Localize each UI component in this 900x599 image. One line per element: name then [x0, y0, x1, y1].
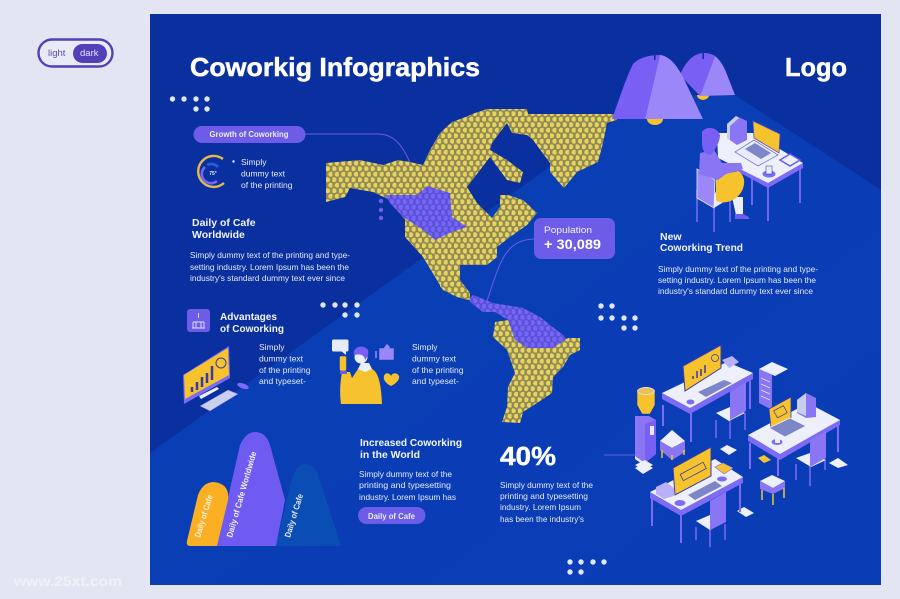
coffee cup [762, 166, 776, 178]
paragraph: daily of cafe: industry's standard dummy text ever since [190, 273, 345, 283]
paragraph: new coworking trend: setting industry. Lorem Ipsum has been the [658, 275, 816, 285]
heading: increased coworking: Increased Coworking [360, 437, 462, 449]
desk back [662, 345, 753, 442]
paragraph: daily of cafe: setting industry. Lorem Ipsum has been the [190, 262, 349, 272]
donut chart 75 percent [198, 156, 224, 187]
dots: right [598, 303, 638, 331]
water cooler [635, 387, 656, 474]
paragraph: new coworking trend: Simply dummy text of the printing and type- [658, 264, 818, 274]
pendant lamps [612, 52, 735, 125]
heading: daily of cafe worldwide: Daily of Cafe [192, 217, 256, 229]
dots: bottom [567, 559, 607, 575]
heading: daily of cafe worldwide [192, 217, 256, 241]
connector: 40 percent to office [604, 454, 636, 456]
paragraph: 40 percent: industry. Lorem Ipsum [500, 502, 581, 512]
paragraph: 40 percent: Simply dummy text of the [500, 480, 593, 490]
mountain chart: Daily of Cafe Worldwide [224, 450, 259, 539]
text: simply dummy text left: of the printing [259, 365, 311, 375]
connector: population to map [487, 239, 534, 301]
dots: center [320, 302, 360, 318]
paragraph: increased coworking: printing and typesetting [359, 480, 451, 490]
text: simply dummy text with bullet: Simply [241, 157, 267, 167]
heading: advantages of coworking [220, 311, 284, 335]
logo: Logo [785, 52, 847, 82]
stat: 40 percent: 40% [500, 441, 556, 471]
callout: population: Population [544, 225, 592, 236]
paragraph: new coworking trend [658, 264, 818, 296]
heading: advantages of coworking: of Coworking [220, 323, 284, 335]
theme toggle: light / dark [38, 40, 112, 66]
illustration: person with phone, like and heart [332, 340, 399, 404]
main dark blue panel [150, 14, 881, 585]
filing cabinet [759, 362, 788, 410]
stool small right [760, 475, 785, 505]
paragraph: 40 percent: has been the industry's [500, 514, 584, 524]
illustration: isometric office [635, 345, 848, 547]
paragraph: 40 percent [500, 480, 593, 524]
text: simply dummy text center: and typeset- [412, 376, 459, 386]
text: simply dummy text left [259, 342, 311, 386]
heading: increased coworking: in the World [360, 449, 420, 461]
text: simply dummy text center: Simply [412, 342, 438, 352]
text: new coworking trend heading: New [660, 231, 682, 243]
callout: population [534, 218, 615, 259]
text: simply dummy text left: dummy text [259, 354, 304, 364]
woman [699, 128, 749, 219]
illustration: woman at desk with laptop [697, 116, 803, 232]
pill: daily of cafe: Daily of Cafe [368, 511, 415, 521]
theme toggle: light / dark: dark [80, 48, 99, 59]
paragraph: increased coworking: industry. Lorem Ipsum has [359, 492, 456, 502]
icon: advantages [187, 309, 210, 332]
text: simply dummy text with bullet: of the printing [241, 180, 293, 190]
illustration: monitor with chart [183, 346, 249, 411]
paragraph: increased coworking: Simply dummy text of the [359, 469, 452, 479]
text: simply dummy text left: and typeset- [259, 376, 306, 386]
mountain chart: Daily of Cafe [192, 493, 215, 539]
desk right [748, 393, 840, 486]
theme toggle: light / dark: light [48, 48, 66, 59]
paragraph: daily of cafe: Simply dummy text of the printing and type- [190, 250, 350, 260]
text: simply dummy text center: dummy text [412, 354, 457, 364]
paragraph: daily of cafe [190, 250, 350, 283]
heading: advantages of coworking: Advantages [220, 311, 277, 323]
paragraph: new coworking trend: industry's standard dummy text ever since [658, 286, 813, 296]
text: simply dummy text center [412, 342, 464, 386]
heading: daily of cafe worldwide: Worldwide [192, 229, 245, 241]
chair [697, 169, 730, 232]
pill: daily of cafe [358, 507, 426, 524]
donut chart 75 percent: 75° [209, 171, 217, 177]
text: simply dummy text with bullet [232, 157, 293, 190]
desk [717, 133, 803, 221]
paper sheets [720, 445, 848, 517]
callout: population: + 30,089 [544, 237, 601, 252]
map: north and south america in dots [326, 109, 617, 423]
text: simply dummy text center: of the printing [412, 365, 464, 375]
paragraph: 40 percent: printing and typesetting [500, 491, 588, 501]
mountain chart [187, 432, 341, 546]
watermark: www.25xt.com [13, 573, 122, 589]
paragraph: increased coworking [359, 469, 456, 502]
mountain chart: Daily of Cafe [282, 492, 305, 539]
text: new coworking trend heading [660, 231, 743, 254]
laptop [735, 121, 780, 166]
connector: pill to map [305, 134, 418, 186]
stool small left [660, 430, 685, 460]
text: new coworking trend heading: Coworking Trend [660, 242, 743, 254]
dots: top left [170, 96, 210, 112]
binders [727, 116, 747, 145]
text: simply dummy text left: Simply [259, 342, 285, 352]
pill: growth of coworking [194, 126, 306, 143]
desk front [650, 447, 743, 547]
title: Coworkig Infographics [190, 52, 480, 82]
heading: increased coworking [360, 437, 462, 461]
pill: growth of coworking: Growth of Coworking [210, 129, 288, 139]
text: simply dummy text with bullet: dummy text [241, 168, 286, 178]
tablet [780, 154, 800, 166]
